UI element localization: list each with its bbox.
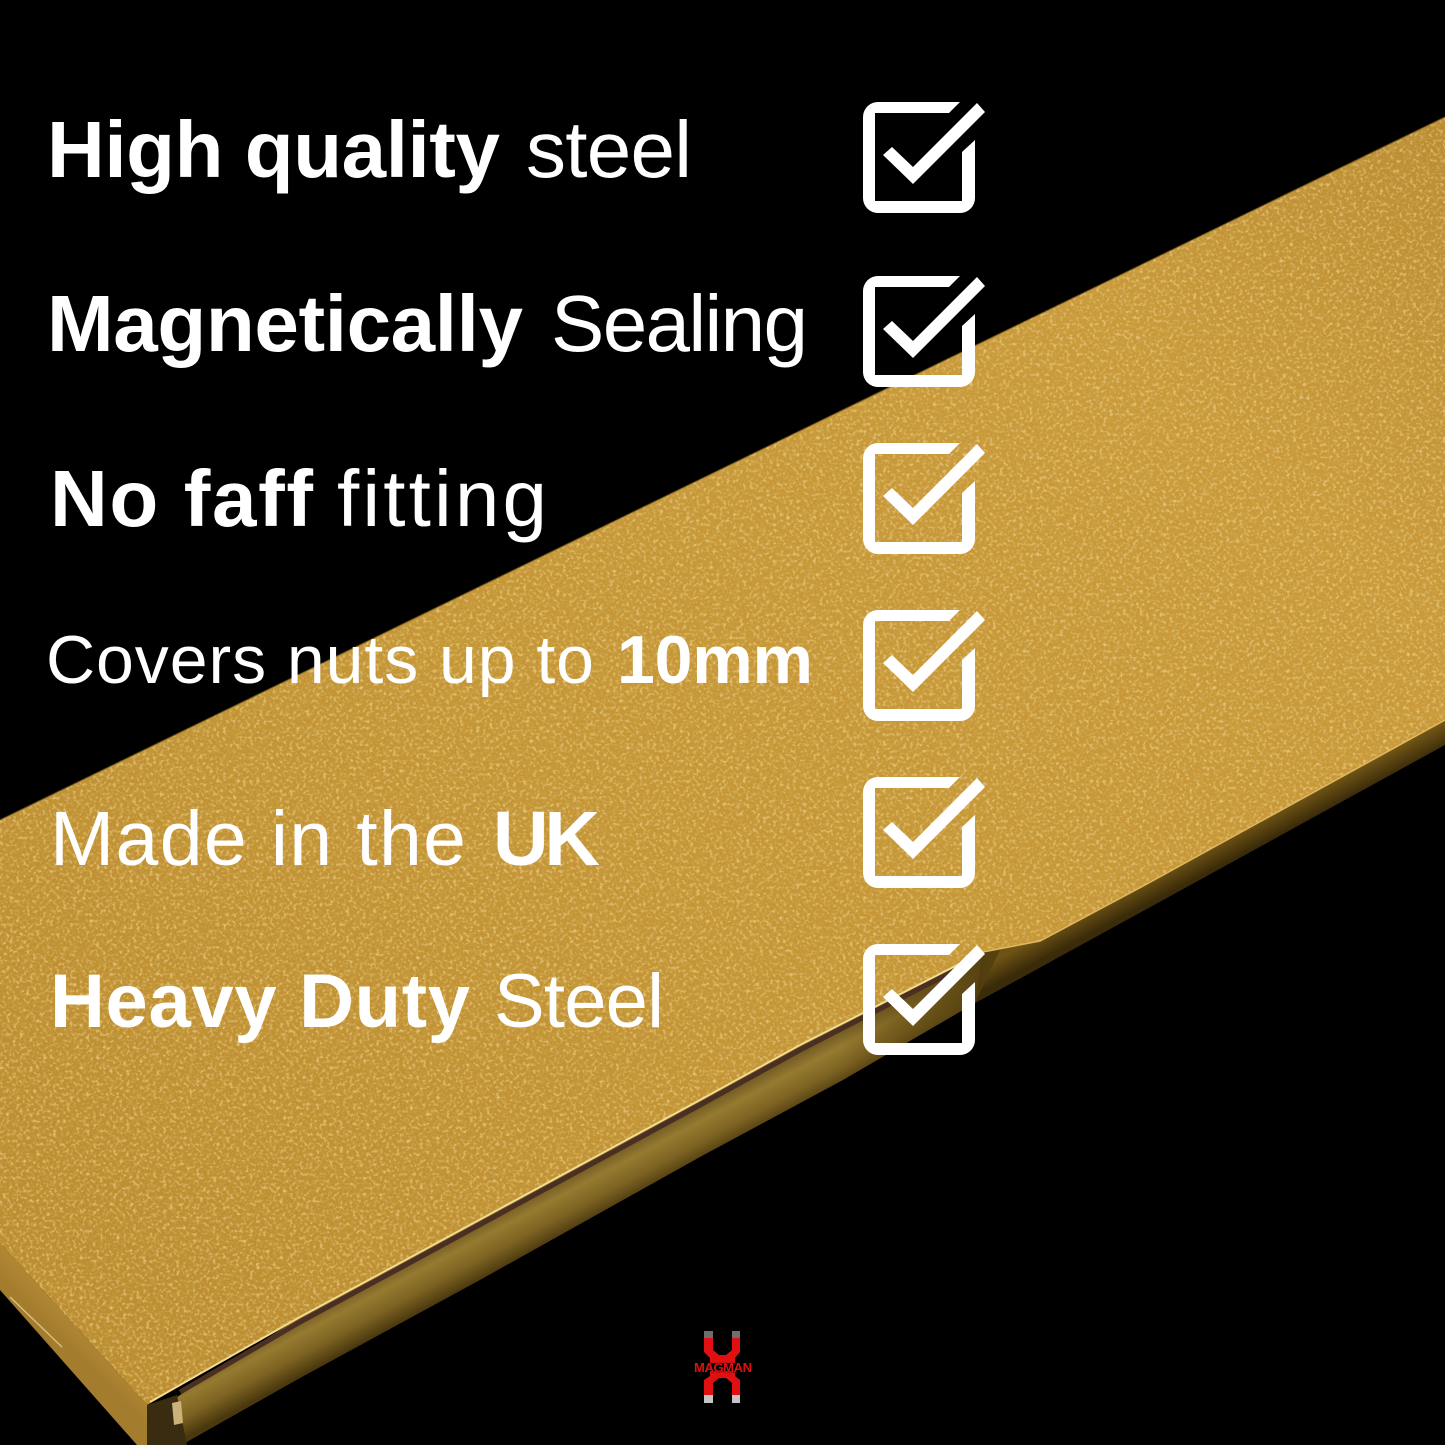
logo wordmark: MAGMAN — [694, 1360, 752, 1375]
feature text: Sealing — [551, 279, 808, 368]
end clip detail — [172, 1401, 183, 1425]
feature text: Made in the — [50, 796, 466, 882]
feature row: Covers nuts up to 10mm — [46, 610, 985, 721]
logo: Magman — [694, 1331, 752, 1403]
feature text — [50, 454, 547, 543]
magnet lower half — [704, 1371, 740, 1395]
strip side wall, fade to dark near the kink — [800, 941, 1050, 1093]
icon: checkbox — [863, 944, 985, 1055]
feature row: Made in the UK — [50, 777, 985, 888]
feature text: fitting — [337, 454, 547, 543]
strip end face — [0, 1243, 147, 1445]
feature row: Heavy Duty Steel — [50, 944, 985, 1055]
icon: checkbox — [863, 777, 985, 888]
feature text: Heavy Duty — [50, 959, 470, 1044]
feature text: High quality — [47, 105, 500, 194]
rolled edge highlight — [150, 952, 983, 1402]
soft upper edge — [0, 117, 1445, 820]
feature text: Covers nuts up to — [46, 622, 594, 698]
magnet upper half — [704, 1338, 740, 1363]
feature text: steel — [526, 105, 692, 194]
strip side wall, right part — [975, 720, 1445, 1003]
feature row: High quality steel — [47, 102, 985, 213]
icon: checkbox — [863, 102, 985, 213]
feature row: No faff fitting — [50, 443, 985, 554]
open channel at strip end — [147, 1395, 187, 1445]
rolled edge shadow line — [180, 960, 975, 1392]
strip side wall, left part — [177, 952, 983, 1443]
feature text: UK — [493, 796, 600, 882]
icon: checkbox — [863, 276, 985, 387]
feature text: 10mm — [617, 622, 813, 698]
feature text: No faff — [50, 454, 313, 543]
right edge highlight — [983, 720, 1445, 952]
feature text: Steel — [494, 959, 664, 1044]
slot in strip end — [10, 1297, 62, 1347]
magnet poles — [704, 1331, 740, 1403]
feature text — [50, 959, 664, 1044]
feature row: Magnetically Sealing — [47, 276, 985, 387]
feature text — [47, 279, 808, 368]
icon: checkbox — [863, 610, 985, 721]
icon: checkbox — [863, 443, 985, 554]
feature text: Magnetically — [47, 279, 524, 368]
